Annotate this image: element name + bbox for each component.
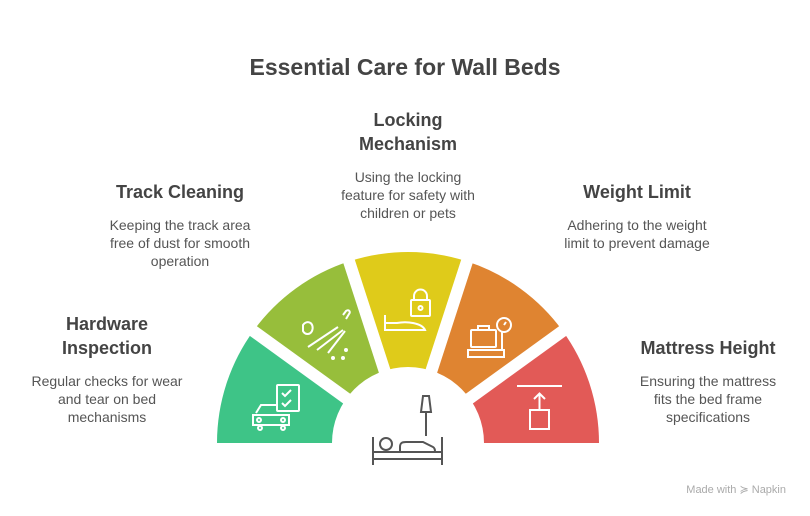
text: hardware inspection: Regular checks for wear [32,373,182,389]
text: mattress height [640,338,776,425]
text: weight limit: limit to prevent damage [564,235,710,251]
text: hardware inspection: Inspection [62,338,152,358]
text: track cleaning: Keeping the track area [110,217,250,233]
footer: made with napkin: Made with ≽ Napkin [686,484,786,496]
text: track cleaning [110,182,250,269]
text: track cleaning: Track Cleaning [116,182,244,202]
text: locking mechanism: feature for safety with [341,187,475,203]
icon: car checklist [253,385,299,430]
text: weight limit: Adhering to the weight [567,217,707,233]
text: track cleaning: free of dust for smooth [110,235,250,251]
text: hardware inspection: mechanisms [68,409,146,425]
icon: bed lock [385,290,430,331]
text: mattress height: specifications [666,409,750,425]
text: hardware inspection: and tear on bed [58,391,156,407]
icon: person sleeping with lamp [373,396,442,465]
icon: height arrow [517,386,562,429]
text: locking mechanism: children or pets [360,205,456,221]
text: mattress height: Ensuring the mattress [640,373,776,389]
text: locking mechanism: Using the locking [355,169,461,185]
text: locking mechanism: Locking [373,110,442,130]
icon: luggage scale [468,318,511,357]
text: mattress height: Mattress Height [640,338,776,358]
text: mattress height: fits the bed frame [654,391,762,407]
title: Essential Care for Wall Beds [249,54,561,80]
text: track cleaning: operation [151,253,209,269]
text: weight limit: Weight Limit [583,182,691,202]
text: hardware inspection [32,314,182,425]
text: weight limit [564,182,710,251]
icon: broom [303,310,350,359]
text: hardware inspection: Hardware [66,314,148,334]
text: locking mechanism [341,110,475,221]
text: locking mechanism: Mechanism [359,134,457,154]
